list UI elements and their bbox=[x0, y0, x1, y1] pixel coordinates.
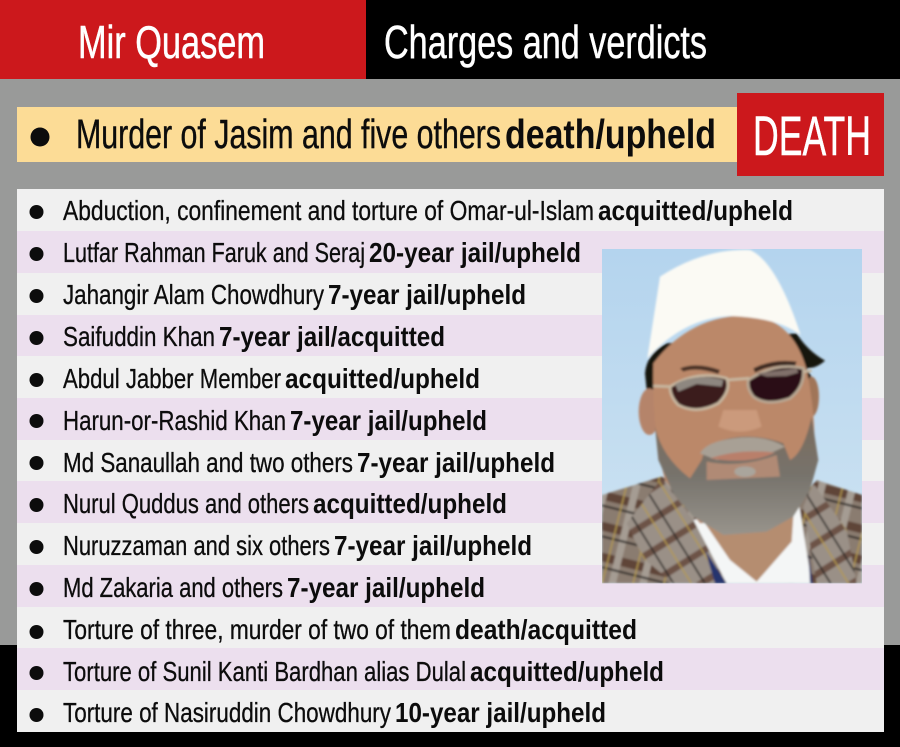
row 8: Nurul Quddus and others bbox=[63, 488, 309, 519]
row 8: acquitted/upheld bbox=[313, 488, 507, 519]
portrait photo of Mir Quasem bbox=[602, 249, 862, 583]
header: name bbox=[0, 0, 366, 79]
row 7 bbox=[30, 447, 555, 478]
row 6 bbox=[30, 405, 487, 436]
row 10: Md Zakaria and others bbox=[63, 572, 283, 603]
row 13: Torture of Nasiruddin Chowdhury bbox=[63, 697, 391, 728]
row 4: Saifuddin Khan bbox=[63, 321, 215, 352]
row 10: 7-year jail/upheld bbox=[287, 572, 485, 603]
row 12: acquitted/upheld bbox=[470, 656, 664, 687]
row 9 bbox=[30, 530, 532, 561]
row 11: death/acquitted bbox=[455, 614, 637, 645]
row 2: 20-year jail/upheld bbox=[369, 237, 581, 268]
header: name: Mir Quasem bbox=[78, 16, 265, 68]
row 12: Torture of Sunil Kanti Bardhan alias Dulal bbox=[63, 656, 466, 687]
row 13: 10-year jail/upheld bbox=[395, 697, 606, 728]
row 5: acquitted/upheld bbox=[285, 363, 480, 394]
highlighted charge: murder of Jasim bbox=[17, 107, 739, 162]
row 3 bbox=[30, 279, 526, 310]
row 5: Abdul Jabber Member bbox=[63, 363, 281, 394]
row 1: acquitted/upheld bbox=[598, 195, 793, 226]
row 6: Harun-or-Rashid Khan bbox=[63, 405, 286, 436]
highlighted charge: murder of Jasim: death/upheld bbox=[505, 111, 716, 157]
row 3: Jahangir Alam Chowdhury bbox=[63, 279, 324, 310]
row 1: Abduction, confinement and torture of Omar-ul-Islam bbox=[63, 195, 594, 226]
header: title bbox=[366, 0, 900, 79]
row 2: Lutfar Rahman Faruk and Seraj bbox=[63, 237, 365, 268]
row 11: Torture of three, murder of two of them bbox=[63, 614, 451, 645]
row 5 bbox=[30, 363, 480, 394]
row 4: 7-year jail/acquitted bbox=[219, 321, 445, 352]
row 7: Md Sanaullah and two others bbox=[63, 447, 353, 478]
row 7: 7-year jail/upheld bbox=[357, 447, 555, 478]
panel: charges list bbox=[17, 189, 884, 732]
header: title: Charges and verdicts bbox=[384, 16, 707, 68]
row 6: 7-year jail/upheld bbox=[290, 405, 487, 436]
row 8 bbox=[30, 488, 507, 519]
row 4 bbox=[30, 321, 445, 352]
row 10 bbox=[30, 572, 485, 603]
highlighted charge: murder of Jasim: Murder of Jasim and five others bbox=[76, 111, 501, 157]
row 9: 7-year jail/upheld bbox=[334, 530, 532, 561]
death verdict box bbox=[737, 93, 884, 176]
row 9: Nuruzzaman and six others bbox=[63, 530, 330, 561]
row 3: 7-year jail/upheld bbox=[328, 279, 526, 310]
